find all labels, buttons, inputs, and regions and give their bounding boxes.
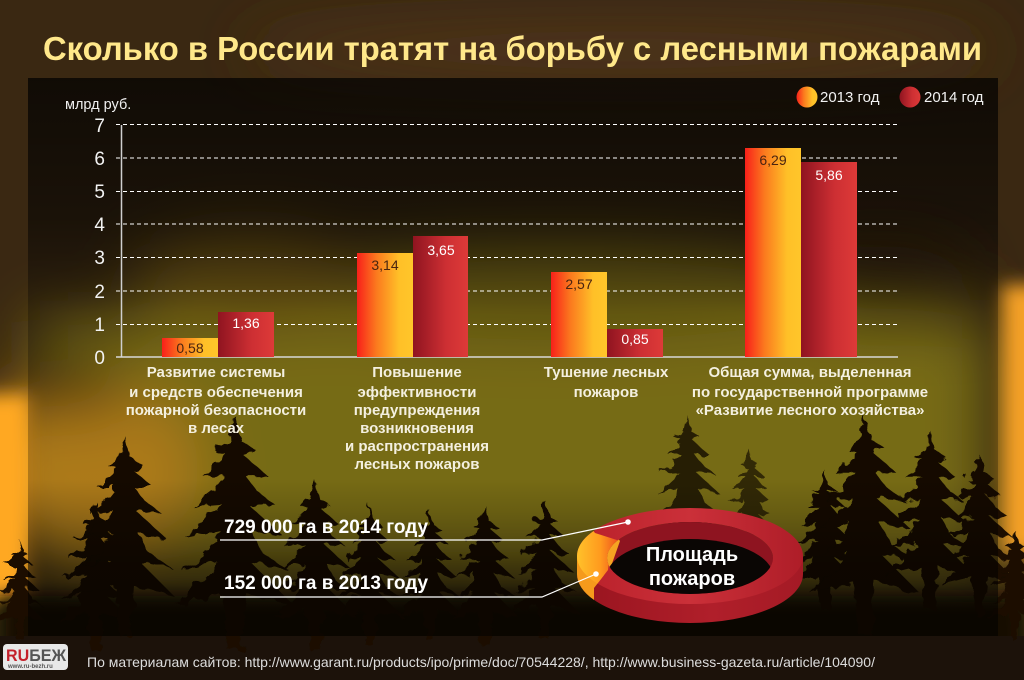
group 3 bars: [551, 272, 663, 357]
category label 2: возникновения: [360, 420, 474, 437]
y axis ticks: 1: [94, 315, 105, 336]
logo: RUБЕЖ: [3, 644, 68, 670]
category label 1: в лесах: [188, 420, 245, 437]
donut chart: fire area: [577, 508, 803, 623]
y axis ticks: 6: [94, 149, 105, 170]
top face: [577, 508, 803, 604]
y axis ticks: 7: [94, 116, 105, 137]
group 2 bars: [357, 236, 468, 357]
legend: 2013 год: [820, 89, 880, 106]
panel: dark overlay: [28, 78, 998, 636]
group 4 bars: 5,86: [815, 167, 843, 183]
legend: 2014 год: [924, 89, 984, 106]
y axis ticks: 2: [94, 282, 105, 303]
dark ground: [0, 596, 1024, 680]
category label 4: по государственной программе: [692, 384, 928, 401]
y axis ticks: 3: [94, 248, 105, 269]
category label 1: пожарной безопасности: [126, 402, 306, 419]
source note: По материалам сайтов: http://www.garant.ru/products/ipo/prime/doc/70544228/, http://www.business-gazeta.ru/article/104090/: [87, 654, 875, 670]
group 1 bars: 1,36: [232, 315, 260, 331]
logo: RUБЕЖ: RUБЕЖ: [6, 646, 67, 665]
callout: 2014: 729 000 га в 2014 году: [224, 517, 429, 538]
callout: 2013: 152 000 га в 2013 году: [224, 573, 429, 594]
category label 1: и средств обеспечения: [129, 384, 303, 401]
unit label: млрд руб.: [65, 97, 131, 113]
bar chart: [94, 116, 898, 369]
group 3 bars: 2,57: [565, 276, 593, 292]
category label 1: Развитие системы: [147, 364, 285, 381]
category label 2: и распространения: [345, 438, 489, 455]
title: Сколько в России тратят на борьбу с лесными пожарами: [43, 31, 982, 68]
logo: RUБЕЖ: www.ru-bezh.ru: [7, 664, 53, 670]
group 2 bars: 3,65: [427, 242, 455, 258]
y axis ticks: 5: [94, 182, 105, 203]
group 1 bars: [162, 312, 274, 357]
category label 3: пожаров: [574, 384, 638, 401]
y axis ticks: [94, 116, 105, 369]
category label 3: Тушение лесных: [544, 364, 669, 381]
outer side wall: [577, 556, 803, 623]
category label 4: «Развитие лесного хозяйства»: [696, 402, 924, 419]
group 4 bars: 6,29: [759, 152, 787, 168]
y axis ticks: 0: [94, 348, 105, 369]
donut label: Площадь: [646, 544, 738, 566]
category label 2: Повышение: [372, 364, 462, 381]
group 2 bars: 3,14: [371, 257, 399, 273]
orange segment: [577, 531, 618, 600]
group 4 bars: [745, 148, 857, 357]
callout: 2014: [220, 517, 631, 540]
callout: 2013: [220, 571, 599, 597]
category label 4: Общая сумма, выделенная: [709, 364, 911, 381]
donut chart: fire area: пожаров: [649, 568, 735, 590]
y axis ticks: 4: [94, 215, 105, 236]
category label 2: эффективности: [358, 384, 476, 401]
inner wall and hole: [607, 522, 773, 594]
legend: [796, 86, 984, 108]
category label 2: предупреждения: [354, 402, 480, 419]
group 3 bars: 0,85: [621, 331, 649, 347]
group 1 bars: 0,58: [176, 340, 204, 356]
category label 2: лесных пожаров: [355, 456, 479, 473]
